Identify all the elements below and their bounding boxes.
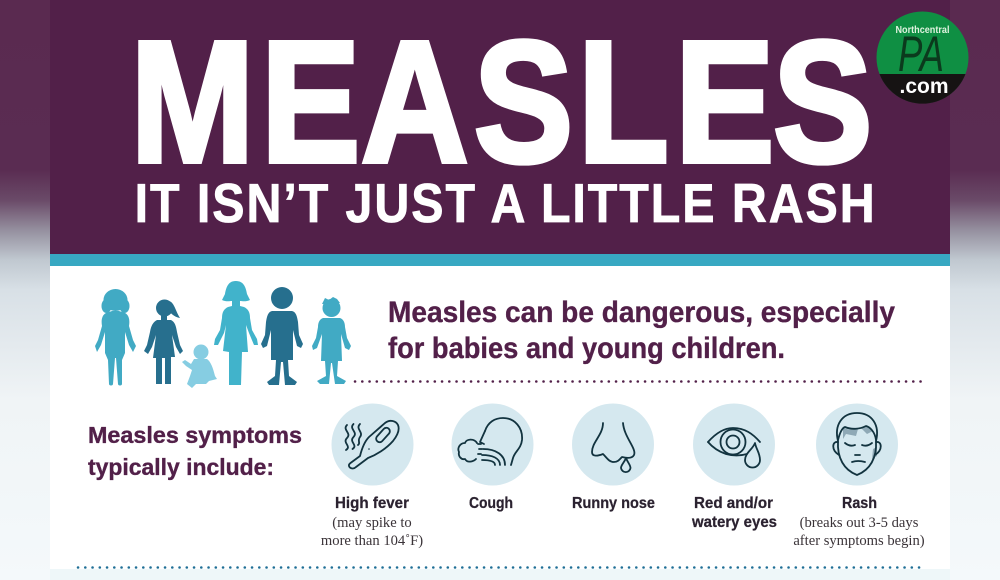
symptom: rash: Rash bbox=[842, 495, 877, 512]
logo: NorthcentralPA.com: Northcentral bbox=[896, 24, 950, 36]
subtitle: IT ISN’T JUST A LITTLE RASH bbox=[135, 172, 875, 234]
silhouette: girl with pigtails bbox=[95, 289, 136, 386]
symptom: high fever: more than 104˚F) bbox=[321, 533, 423, 549]
icon: face with rash bbox=[816, 404, 898, 486]
symptom: rash bbox=[793, 404, 925, 549]
symptom: high fever: High fever bbox=[335, 495, 409, 512]
logo: NorthcentralPA.com bbox=[876, 12, 968, 104]
symptoms heading bbox=[88, 422, 302, 480]
children silhouettes bbox=[95, 281, 351, 388]
icon: nose with drip bbox=[572, 404, 654, 486]
symptom: runny nose: Runny nose bbox=[572, 495, 655, 512]
symptom: rash: (breaks out 3-5 days bbox=[800, 515, 919, 531]
symptom: cough bbox=[452, 404, 534, 512]
intro text bbox=[388, 296, 896, 365]
silhouette: baby bbox=[182, 344, 217, 388]
panel: infographic body bbox=[50, 260, 950, 569]
teal band bbox=[50, 254, 950, 266]
bottom pale strip bbox=[50, 569, 950, 580]
symptom: rash: after symptoms begin) bbox=[793, 533, 925, 549]
symptom: high fever: (may spike to bbox=[332, 515, 412, 531]
icon: eye with tear bbox=[693, 404, 775, 486]
symptom: runny nose bbox=[572, 404, 655, 512]
logo: NorthcentralPA.com: PA bbox=[898, 26, 944, 82]
logo: NorthcentralPA.com: .com bbox=[899, 75, 949, 98]
symptom: red and/or watery eyes bbox=[691, 404, 777, 531]
dotted divider bbox=[355, 380, 926, 383]
intro text: for babies and young children. bbox=[388, 332, 785, 365]
panel: title banner bbox=[50, 0, 950, 254]
symptoms heading: Measles symptoms bbox=[88, 422, 302, 448]
dotted divider bbox=[78, 566, 925, 569]
symptom: red and/or watery eyes: Red and/or bbox=[694, 495, 773, 512]
silhouette: boy with curly hair bbox=[261, 287, 303, 385]
symptoms heading: typically include: bbox=[88, 454, 274, 480]
icon: thermometer bbox=[332, 404, 414, 486]
symptom: red and/or watery eyes: watery eyes bbox=[691, 514, 777, 531]
icon: coughing head bbox=[452, 404, 534, 486]
symptom: high fever bbox=[321, 404, 423, 549]
silhouette: tall girl bbox=[214, 281, 258, 385]
silhouette: boy bbox=[312, 297, 351, 384]
symptom: cough: Cough bbox=[469, 495, 513, 512]
intro text: Measles can be dangerous, especially bbox=[388, 296, 896, 329]
title: MEASLES bbox=[130, 6, 872, 199]
silhouette: girl in dress bbox=[144, 300, 183, 384]
